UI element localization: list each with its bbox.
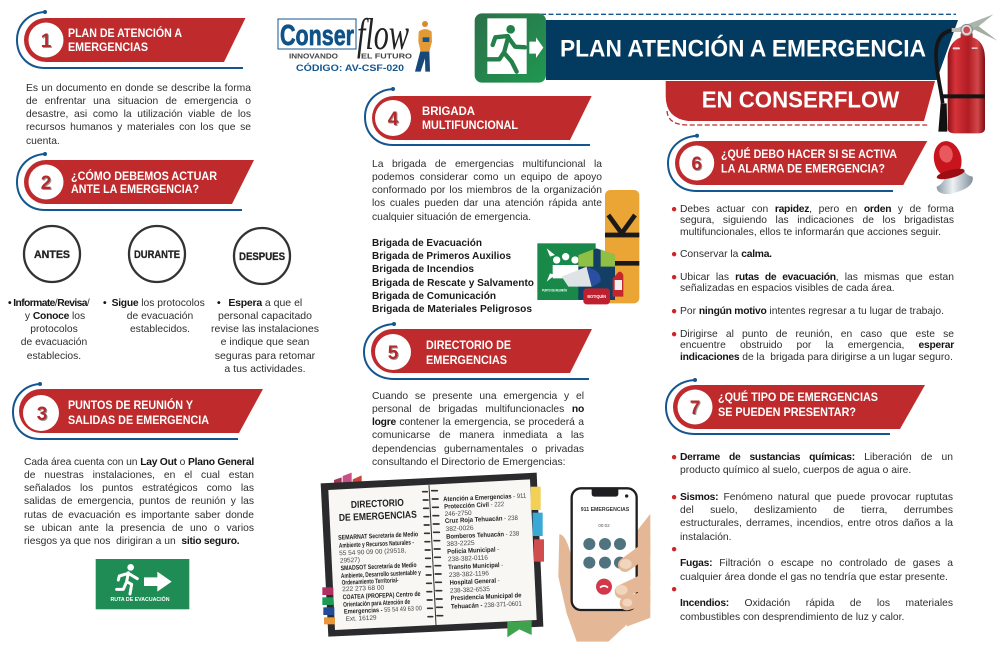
header 7: tipo de emergencias: SE PUEDEN PRESENTAR?	[718, 407, 856, 419]
list of brigades: Brigada de Rescate y Salvamento	[372, 277, 534, 289]
subtitle: en conserflow: EN CONSERFLOW	[702, 86, 900, 112]
notebook right page contacts: Hospital General -	[449, 578, 500, 587]
text: despues: personal capacitado	[218, 310, 312, 322]
bullet: conservar la calma: ●	[671, 248, 677, 260]
bullet: punto de reunión: encuentre obstruido por la emergencia, esperar	[680, 340, 954, 351]
header 4: brigada multifuncional	[365, 87, 592, 145]
text: section 7 emergency types: Fugas: Filtración o escape no controlado de gases a	[680, 558, 953, 569]
header 5: directorio de emergencias	[364, 322, 592, 379]
notebook right page contacts: 238-382-1196	[449, 570, 489, 579]
text: section 4 description: cualquier situación de emergencia.	[372, 212, 531, 223]
text: section 3 description: de nuestras instalaciones, en el cual estan	[24, 470, 254, 481]
header 7: tipo de emergencias: ¿QUÉ TIPO DE EMERGENCIAS	[718, 391, 878, 404]
circle: antes	[24, 226, 80, 282]
logo: Conserflow: INNOVANDO	[289, 52, 338, 60]
notebook left page contacts: 222 273 68 00	[342, 584, 385, 593]
text: despues	[211, 296, 319, 375]
logo: Conserflow: CÓDIGO: AV-CSF-020	[296, 62, 404, 74]
bullet: rutas de evacuación: ●	[671, 272, 677, 282]
text: section 4 description: conformado por los miembros de la organización	[372, 185, 602, 196]
text: despues: revise las instalaciones	[211, 323, 319, 335]
notebook left page contacts: Orientación para Atención de	[343, 599, 411, 609]
text: section 7 emergency types: Derrame de sustancias químicas: Liberación de un	[680, 452, 953, 463]
notebook left page contacts: Emergencias - 55 54 49 63 00	[344, 605, 422, 616]
text: section 5 description	[372, 390, 584, 468]
notebook right page contacts: 383-2225	[446, 540, 475, 548]
header 4: brigada multifuncional: 4	[388, 109, 399, 130]
list of brigades: Brigada de Primeros Auxilios	[372, 250, 511, 262]
green route sign: RUTA DE EVACUACIÓN	[110, 595, 170, 603]
bullet: punto de reunión	[671, 328, 954, 363]
header 1: plan de atención: 1	[41, 31, 52, 52]
bullet: punto de reunión: indicaciones de la brigada para dirigirse a un lugar seguro.	[680, 352, 953, 363]
logo: Conserflow: flow	[357, 10, 409, 59]
notebook right page contacts: Policía Municipal -	[447, 546, 499, 556]
bullet: rutas de evacuación	[671, 272, 954, 294]
icon: emergency exit sign	[475, 13, 546, 83]
notebook left page contacts: SEMARNAT Secretaría de Medio	[338, 531, 418, 542]
notebook left page contacts: SMADSOT Secretaría de Medio	[340, 562, 417, 572]
header 2: cómo debemos actuar: ANTE LA EMERGENCIA?	[71, 184, 199, 196]
text: antes	[8, 298, 90, 362]
header 5: directorio de emergencias: 5	[389, 344, 400, 365]
notebook left page contacts: 29527)	[340, 557, 360, 565]
text: section 5 description: comunicarse de manera inmediata a las	[372, 430, 584, 441]
header 2: cómo debemos actuar: ¿CÓMO DEBEMOS ACTUAR	[71, 170, 218, 183]
phone in hand	[558, 488, 657, 642]
notebook left page contacts	[338, 531, 422, 623]
notebook right page contacts: 382-0026	[445, 525, 474, 533]
text: section 7 emergency types: Sismos: Fenómeno natural que puede provocar ruptutas	[680, 492, 953, 503]
text: section 5 description: Cuando se presente una emergencia y el	[372, 390, 584, 402]
text: section 7 emergency types: ●	[671, 544, 677, 555]
text: despues: e indique que sean	[221, 336, 309, 348]
text: section 1 description: Es un documento en donde se describe la forma	[26, 82, 251, 94]
circle: despues	[234, 228, 290, 284]
icon: alarm beacon	[930, 139, 973, 194]
text: despues: a tus actividades.	[224, 363, 306, 375]
notebook right page contacts: Atención a Emergencias - 911	[443, 493, 527, 503]
icon: worker	[415, 21, 432, 72]
title: plan atención a emergencia	[541, 14, 958, 80]
notebook heading: DIRECTORIO	[351, 498, 404, 511]
subtitle: en conserflow	[666, 81, 935, 125]
header 1: plan de atención: 1	[42, 32, 53, 53]
text: section 5 description: personal de brigadas multifuncionacles no	[372, 404, 584, 415]
text: section 7 emergency types: ●	[671, 452, 677, 463]
brigade equipment illustration: PUNTO DE REUNIÓN	[542, 287, 567, 292]
logo: Conserflow: Conser	[280, 20, 354, 52]
text: section 4 description: los cuales pueden dar una atención rápida ante	[372, 198, 602, 209]
bullet: actuar con rapidez: Debes actuar con rapidez, pero en orden y de forma	[680, 204, 954, 214]
text: section 1 description: recursos humanos y materiales con los que se	[26, 122, 251, 133]
list of brigades: Brigada de Evacuación	[372, 237, 482, 249]
text: section 7 emergency types	[671, 452, 953, 623]
text: durante	[103, 298, 205, 335]
notebook right page contacts: Protección Civil - 222	[444, 501, 505, 511]
header 7: tipo de emergencias: 7	[691, 399, 701, 420]
logo: Conserflow: EL FUTURO	[361, 52, 412, 60]
text: section 3 description: rutas de evacuación es importante saber donde	[24, 510, 254, 521]
text: section 6 action list	[671, 204, 954, 363]
header 2: cómo debemos actuar	[17, 152, 254, 210]
text: durante: de evacuación	[127, 311, 193, 322]
bullet: conservar la calma: Conservar la calma.	[680, 248, 772, 260]
notebook heading: DE EMERGENCIAS	[339, 510, 417, 524]
text: antes: de evacuación	[21, 337, 87, 348]
notebook right page contacts: Cruz Roja Tehuacán - 238	[445, 515, 518, 525]
logo: Conserflow	[278, 10, 432, 74]
text: antes: • Informate/Revisa/	[8, 298, 89, 308]
phone in hand: 911 EMERGENCIAS	[581, 507, 630, 513]
notebook left page contacts: Ext. 16129	[345, 615, 377, 623]
title: plan atención a emergencia: PLAN ATENCIÓN A EMERGENCIA	[560, 35, 926, 63]
text: section 7 emergency types: ●	[671, 492, 677, 503]
notebook left page contacts: COATEA (PROFEPA) Centro de	[342, 591, 421, 601]
list of brigades	[372, 237, 534, 315]
text: section 3 description	[24, 456, 254, 547]
text: section 4 description: podemos considerar como un equipo de apoyo	[372, 172, 602, 183]
bullet: actuar con rapidez: segura, siguiendo las indicaciones de los brigadistas	[680, 215, 954, 226]
text: section 7 emergency types: Incendios: Oxidación rápida de los materiales	[680, 598, 953, 609]
header 1: plan de atención: PLAN DE ATENCIÓN A	[68, 27, 182, 40]
bullet: punto de reunión: Dirigirse al punto de reunión, en caso que este se	[680, 328, 954, 340]
text: section 3 description: riesgos ya que nos dirigiran a un sitio seguro.	[24, 536, 239, 547]
text: section 4 description: La brigada de emergencias multifuncional la	[372, 158, 602, 170]
text: durante: • Sigue los protocolos	[103, 298, 205, 308]
notebook right page contacts: 238-382-0116	[448, 555, 488, 563]
icon: fire extinguisher	[936, 14, 997, 133]
list of brigades: Brigada de Materiales Peligrosos	[372, 303, 532, 315]
header 6: alarma: 6	[691, 154, 702, 175]
notebook: directorio de emergencias	[321, 473, 544, 637]
header 7: tipo de emergencias	[666, 378, 925, 434]
text: section 1 description	[26, 82, 251, 147]
header 3: puntos de reunión: SALIDAS DE EMERGENCIA	[68, 415, 209, 427]
bullet: rutas de evacuación: señalizadas en espacios visibles de cada área.	[680, 283, 895, 294]
text: antes: protocolos	[30, 324, 78, 335]
bullet: rutas de evacuación: Ubicar las rutas de evacuación, las mismas que estan	[680, 272, 954, 282]
circle: antes: ANTES	[34, 249, 70, 261]
bullet: ningún motivo: Por ningún motivo intentes regresar a tu lugar de trabajo.	[680, 306, 944, 316]
header 3: puntos de reunión: 3	[38, 405, 48, 426]
header 7: tipo de emergencias: 7	[690, 398, 700, 419]
text: durante: establecidos.	[130, 324, 190, 335]
header 3: puntos de reunión: 3	[37, 404, 47, 425]
header 6: alarma: ¿QUÉ DEBO HACER SI SE ACTIVA	[721, 148, 897, 161]
text: section 5 description: dependencias gubernamentales o privadas	[372, 444, 584, 455]
text: antes: establecios.	[27, 351, 81, 362]
text: section 1 description: cuenta.	[26, 136, 60, 147]
notebook right page contacts	[443, 493, 527, 611]
notebook right page contacts: 246-2750	[444, 510, 472, 518]
header 6: alarma	[668, 134, 927, 191]
text: section 7 emergency types: producto químico al suelo, cuerpos de agua o aire.	[680, 465, 911, 476]
text: despues: • Espera a que el	[217, 296, 302, 308]
header 4: brigada multifuncional: MULTIFUNCIONAL	[422, 120, 518, 132]
notebook left page contacts: Ambiente y Recursos Naturales -	[339, 539, 414, 550]
text: section 3 description: salidas de emergencia, puntos de reunión y las	[24, 496, 254, 507]
green route sign	[96, 559, 189, 609]
notebook right page contacts: Bomberos Tehuacán - 238	[446, 531, 520, 541]
notebook tabs and cover	[321, 473, 544, 637]
bullet: punto de reunión: ●	[671, 328, 677, 340]
text: section 4 description	[372, 158, 602, 223]
text: antes: y Conoce los	[25, 311, 85, 322]
notebook right page contacts: Transito Municipal -	[448, 562, 503, 571]
circle: durante	[129, 226, 185, 282]
text: section 7 emergency types: ●	[671, 584, 677, 595]
header 5: directorio de emergencias: EMERGENCIAS	[426, 355, 507, 367]
text: despues: seguras para retomar	[215, 350, 315, 362]
header 2: cómo debemos actuar: 2	[41, 173, 51, 194]
header 4: brigada multifuncional: BRIGADA	[422, 106, 475, 118]
text: section 3 description: se ubican ante la presencia de uno o varios	[24, 523, 254, 534]
list of brigades: Brigada de Comunicación	[372, 290, 496, 302]
text: section 5 description: logre contener la emergencia, se procederá a	[372, 417, 584, 428]
header 2: cómo debemos actuar: 2	[42, 174, 52, 195]
header 3: puntos de reunión: PUNTOS DE REUNIÓN Y	[68, 399, 193, 412]
text: section 7 emergency types: estructurales, derrames, incendios, entre otros daños a la	[680, 518, 953, 529]
brigade equipment illustration: BOTIQUÍN	[587, 292, 607, 299]
text: section 3 description: señalados los puntos estratégicos como las	[24, 483, 254, 494]
circle: durante: DURANTE	[134, 249, 180, 261]
text: section 1 description: de enfrentar una situacion de emergencia o	[26, 96, 251, 107]
header 6: alarma: LA ALARMA DE EMERGENCIA?	[721, 163, 885, 175]
notebook heading	[339, 498, 417, 524]
phone in hand: 00:02	[598, 523, 610, 528]
header 5: directorio de emergencias: DIRECTORIO DE	[426, 340, 511, 352]
notebook right page contacts: 238-382-6535	[450, 586, 490, 595]
header 6: alarma: 6	[692, 155, 703, 176]
header 3: puntos de reunión	[13, 382, 263, 439]
bullet: ningún motivo: ●	[671, 306, 677, 316]
circle: despues: DESPUES	[239, 251, 285, 263]
text: section 7 emergency types: combustibles con desprendimiento de luz y calor.	[680, 612, 904, 623]
notebook right page contacts: Tehuacán - 238-371-0601	[451, 601, 522, 611]
brigade equipment illustration	[537, 190, 639, 304]
text: section 1 description: desastre, asi como la utilización viable de los	[26, 109, 251, 120]
text: section 3 description: Cada área cuenta con un Lay Out o Plano General	[24, 456, 254, 468]
notebook left page contacts: 55 54 90 09 00 (29518,	[339, 547, 406, 557]
header 1: plan de atención	[17, 10, 246, 68]
bullet: actuar con rapidez	[671, 204, 954, 238]
text: section 7 emergency types: instalación.	[680, 532, 732, 543]
text: section 5 description: consultando el Directorio de Emergencias:	[372, 457, 565, 468]
list of brigades: Brigada de Incendios	[372, 263, 474, 275]
text: section 7 emergency types: del suelo, deslizamiento de tierra, derrumbes	[680, 505, 953, 516]
notebook right page contacts: Presidencia Municipal de	[450, 592, 522, 602]
text: section 7 emergency types: cualquier área donde el gas no tendría que estar presente.	[680, 572, 948, 583]
bullet: actuar con rapidez: ●	[671, 204, 677, 214]
header 1: plan de atención: EMERGENCIAS	[68, 42, 148, 54]
bullet: actuar con rapidez: multifuncionales, ellos te informarán que acciones seguir.	[680, 227, 941, 238]
header 5: directorio de emergencias: 5	[388, 343, 399, 364]
notebook left page contacts: Ambiente, Desarrollo sustentable y	[341, 570, 421, 580]
header 4: brigada multifuncional: 4	[389, 110, 400, 131]
notebook left page contacts: Ordenamiento Territorial-	[341, 577, 399, 587]
